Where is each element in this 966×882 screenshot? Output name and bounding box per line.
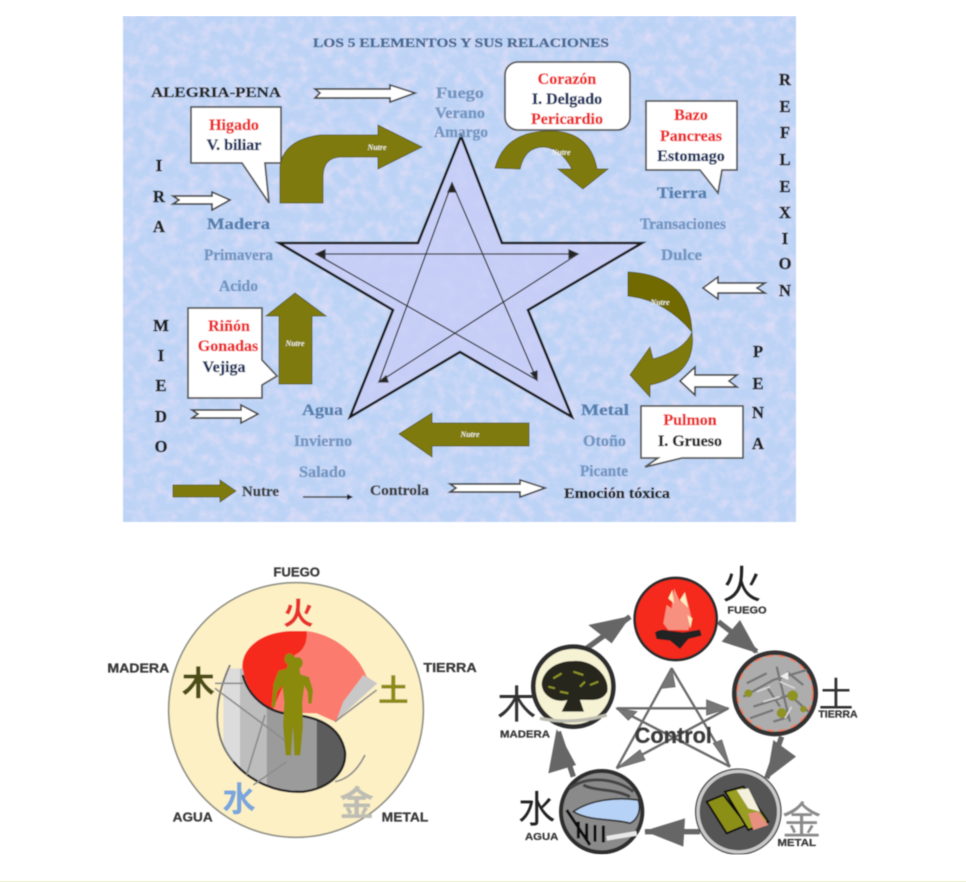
element: wood disc [533,647,613,727]
callout: heart: Pericardio [531,111,603,128]
callout: lung: Pulmon [663,412,717,429]
glyph: fire: 火 [722,563,761,607]
callout: lung: I. Grueso [658,433,722,450]
arrow: wood nourishes fire: Nutre [366,143,387,152]
text: water element [294,402,352,481]
text: wood element [204,216,273,295]
element: fire disc [635,578,717,660]
arrow: metal nourishes water [399,413,529,457]
label: agua: AGUA [525,832,558,843]
vertical label: reflexion: F [780,123,790,142]
callout: liver [191,107,281,203]
human figure [272,653,313,755]
legend: Nutre [242,484,279,500]
label: fuego: FUEGO [273,565,320,579]
arrow: earth nourishes metal: Nutre [649,298,670,307]
control label: Control [635,723,712,748]
text: metal element: Otoño [583,433,626,450]
text: wood element: Primavera [204,247,273,264]
element: earth disc [734,653,816,734]
yin region: greys [222,668,345,792]
legend: nourish arrow [173,480,236,502]
text: fire element: Amargo [434,124,488,141]
arrow: wood nourishes fire [280,125,422,203]
legend: control arrow [303,496,349,498]
label: madera: MADERA [500,729,550,740]
arrow: earth nourishes metal [628,272,692,397]
text: wood element: Madera [207,216,270,233]
text: metal element: Picante [580,463,628,480]
heading: alegria-pena: ALEGRIA-PENA [151,85,281,101]
vertical label: pena: P [753,342,763,361]
vertical label: pena: N [752,403,764,422]
vertical label: pena: A [752,434,764,453]
glyph: metal: 金 [782,799,821,843]
yin-yang s-curve [233,675,345,792]
cycle arrows [548,616,796,847]
label: madera: MADERA [107,661,169,675]
connecting lines [215,683,377,785]
callout: kidney [188,308,277,398]
glyph: wood: 木 [182,666,215,703]
vertical label: reflexion: L [779,150,791,169]
yang region: pink [272,631,377,722]
vertical label: reflexion: E [779,97,791,116]
glyph: wood: 木 [497,683,536,727]
text: fire element: Fuego [436,85,484,102]
text: water element: Agua [302,402,343,419]
legend: Emoción tóxica [564,486,671,502]
vertical label: ira: R [153,187,166,206]
callout: spleen: Pancreas [660,128,722,145]
vertical label: miedo: O [155,437,168,456]
arrow: miedo to water [192,405,258,423]
callout: lung [641,406,743,467]
legend: Controla [370,483,430,499]
vertical label: miedo: M [153,316,169,335]
vertical label: miedo: D [155,407,167,426]
vertical label: reflexion [779,70,792,300]
glyph: earth: 土 [378,675,409,709]
legend [173,480,671,502]
text: earth element: Tierra [657,185,707,202]
vertical label: reflexion: R [779,70,792,89]
callout: kidney: Vejiga [203,359,245,376]
callout: heart [505,62,630,130]
star: generation outline [279,136,642,417]
arrow: water nourishes wood: Nutre [284,339,305,348]
text: fire element: Verano [435,105,485,122]
arrow: reflexion to earth [703,277,765,299]
label: tierra: TIERRA [818,710,858,721]
yang region: red [242,631,307,712]
label: agua: AGUA [173,811,213,825]
vertical label: ira [153,156,166,236]
vertical label: miedo: I [158,346,164,365]
vertical label: pena [752,342,764,453]
panel: generation and control cycle [497,563,858,854]
text: wood element: Acido [219,278,258,295]
label: metal: METAL [777,838,816,849]
element: water disc [561,771,642,852]
text: earth element: Dulce [661,247,702,264]
callout: heart: I. Delgado [532,91,602,108]
outer cream disc [169,583,423,837]
grey wedge [337,675,377,720]
text: earth element [640,185,726,264]
text: earth element: Transaciones [640,216,726,233]
arrow: ira to wood [173,192,230,210]
arrow: water nourishes wood [266,293,326,384]
glyph: metal: 金 [339,786,374,824]
title: LOS 5 ELEMENTOS Y SUS RELACIONES [313,35,609,50]
vertical label: miedo: E [155,376,167,395]
callout: kidney: Riñón [208,318,250,335]
arrow: fire nourishes earth [495,131,608,189]
arrow: pena to metal [680,367,737,395]
callout: spleen: Bazo [674,107,708,124]
vertical label: reflexion: E [779,177,791,196]
panel background [123,16,796,522]
arrow: fire nourishes earth: Nutre [550,148,571,157]
callout: liver: V. biliar [207,137,261,154]
text: water element: Salado [299,464,346,481]
vertical label: miedo [153,316,169,456]
vertical label: pena: E [752,374,764,393]
glyph: water: 水 [222,782,256,819]
callout: spleen [646,101,737,193]
panel: yin-yang circle [107,565,477,837]
label: tierra: TIERRA [423,661,477,675]
star: control arrows [316,183,578,382]
text: metal element: Metal [581,402,630,419]
vertical label: ira: I [156,156,162,175]
panel: five elements diagram [123,16,796,522]
arrow: metal nourishes water: Nutre [459,430,480,439]
vertical label: reflexion: O [779,254,792,273]
callout: kidney: Gonadas [198,338,258,355]
control star [617,668,730,768]
glyph: water: 水 [518,789,555,831]
vertical label: reflexion: X [779,203,791,222]
text: fire element [434,85,488,141]
text: metal element [580,402,630,480]
element: metal disc [696,769,781,854]
vertical label: reflexion: N [779,281,791,300]
vertical label: reflexion: I [782,229,788,248]
thin outer arc [217,665,233,762]
vertical label: ira: A [153,217,165,236]
legend: toxic emotion arrow [450,480,545,497]
glyph: fire: 火 [283,597,314,631]
label: fuego: FUEGO [727,605,767,616]
arrow: emotion to fire [315,85,415,102]
text: water element: Invierno [294,433,352,450]
callout: liver: Higado [209,117,259,134]
callout: spleen: Estomago [657,148,725,165]
label: metal: METAL [382,811,429,825]
callout: heart: Corazón [538,71,596,88]
glyph: earth: 土 [819,677,853,716]
